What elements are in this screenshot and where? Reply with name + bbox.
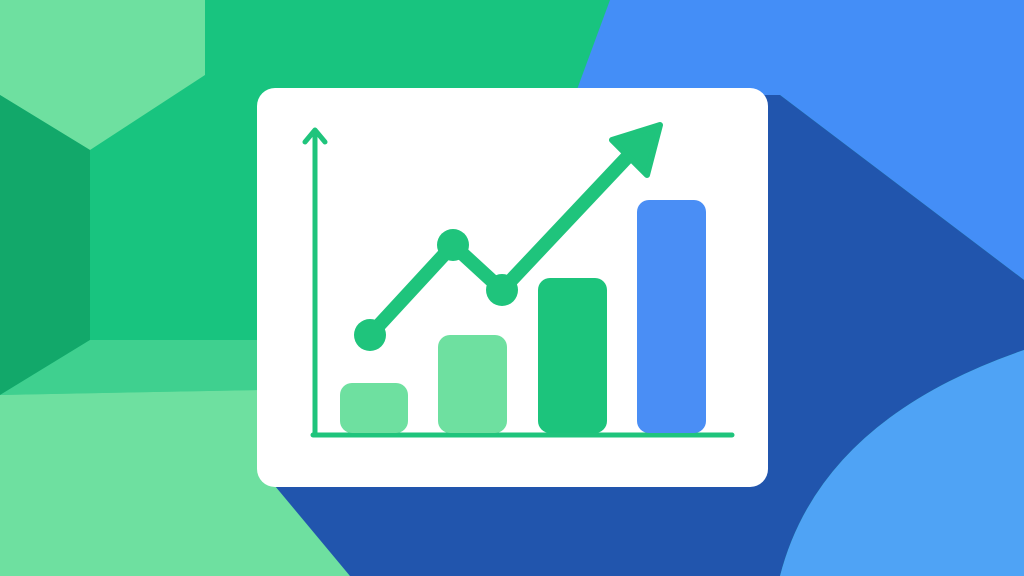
axes xyxy=(305,130,732,435)
trend line arrow xyxy=(354,125,660,351)
background: blue side xyxy=(270,0,1024,576)
card xyxy=(257,88,768,487)
bar chart xyxy=(340,200,706,433)
